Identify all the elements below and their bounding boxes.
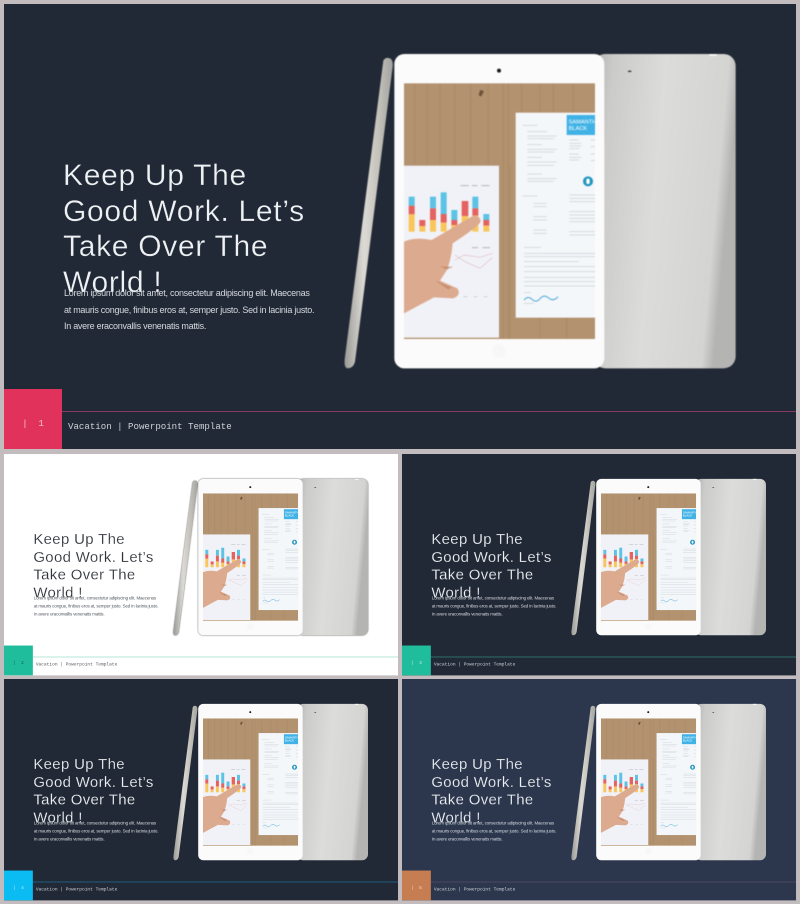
title: Take Over The (431, 792, 533, 808)
title: World ! (431, 584, 481, 601)
body text: In avere eraconvallis venenatis mattis. (64, 321, 206, 331)
title: Keep Up The (431, 531, 523, 548)
page number badge (4, 871, 33, 900)
tablet mockup (173, 704, 368, 860)
body text: at mauris congue, finibus eros at, semper justo. Sed in lacinia justo. (34, 829, 158, 834)
title (33, 756, 154, 826)
tablet mockup (172, 478, 369, 636)
body text: at mauris congue, finibus eros at, semper justo. Sed in lacinia justo. (432, 604, 556, 609)
body text (432, 820, 556, 842)
body text (34, 820, 158, 842)
title: Good Work. Let’s (63, 195, 305, 228)
page number badge (402, 646, 431, 675)
body text: Lorem ipsum dolor sit amet, consectetur adipiscing elit. Maecenas (64, 288, 310, 298)
slide: dark blue variant (4, 679, 398, 900)
tablet mockup (571, 704, 766, 860)
body text (64, 288, 314, 331)
page number: | 1 (22, 419, 44, 429)
page number: | 5 (411, 885, 422, 890)
title: World ! (63, 266, 162, 299)
title: Take Over The (33, 792, 135, 808)
body text: In avere eraconvallis venenatis mattis. (432, 612, 503, 617)
title: Good Work. Let’s (431, 549, 552, 565)
body text: Lorem ipsum dolor sit amet, consectetur adipiscing elit. Maecenas (34, 595, 156, 600)
body text: Lorem ipsum dolor sit amet, consectetur adipiscing elit. Maecenas (432, 820, 554, 825)
body text: at mauris congue, finibus eros at, semper justo. Sed in lacinia justo. (432, 829, 556, 834)
title: Keep Up The (431, 756, 523, 773)
body text: at mauris congue, finibus eros at, semper justo. Sed in lacinia justo. (64, 305, 314, 315)
title (63, 159, 305, 299)
tablet mockup (344, 53, 736, 370)
body text (432, 595, 556, 617)
body text: In avere eraconvallis venenatis mattis. (34, 612, 105, 617)
footer text: Vacation | Powerpoint Template (434, 661, 515, 667)
body text: In avere eraconvallis venenatis mattis. (34, 837, 105, 842)
body text: at mauris congue, finibus eros at, semper justo. Sed in lacinia justo. (34, 604, 158, 609)
body text: Lorem ipsum dolor sit amet, consectetur adipiscing elit. Maecenas (432, 595, 554, 600)
slide: slate orange variant (402, 679, 796, 900)
footer text: Vacation | Powerpoint Template (36, 886, 117, 892)
title: Keep Up The (33, 531, 125, 548)
title: Good Work. Let’s (33, 774, 154, 790)
title (431, 531, 552, 601)
title: World ! (431, 809, 481, 826)
title: Good Work. Let’s (33, 549, 154, 565)
slide: dark teal variant (402, 454, 796, 675)
page number badge (402, 871, 431, 900)
title: World ! (33, 584, 83, 601)
page number badge (4, 646, 33, 675)
title: Keep Up The (33, 756, 125, 773)
body text: In avere eraconvallis venenatis mattis. (432, 837, 503, 842)
body text (34, 595, 158, 617)
title (33, 531, 154, 601)
title: Keep Up The (63, 159, 247, 192)
body text: Lorem ipsum dolor sit amet, consectetur adipiscing elit. Maecenas (34, 820, 156, 825)
title: Take Over The (63, 230, 268, 263)
title: Take Over The (33, 567, 135, 583)
footer text: Vacation | Powerpoint Template (68, 421, 232, 432)
footer text: Vacation | Powerpoint Template (36, 661, 117, 667)
slide: main dark (4, 4, 796, 449)
title (431, 756, 552, 826)
slide: white variant (4, 454, 398, 675)
page number: | 4 (13, 885, 24, 890)
page number badge (4, 389, 62, 449)
title: Good Work. Let’s (431, 774, 552, 790)
footer text: Vacation | Powerpoint Template (434, 886, 515, 892)
page number: | 2 (13, 660, 24, 665)
title: World ! (33, 809, 83, 826)
title: Take Over The (431, 567, 533, 583)
page number: | 3 (411, 660, 422, 665)
tablet mockup (571, 478, 766, 636)
